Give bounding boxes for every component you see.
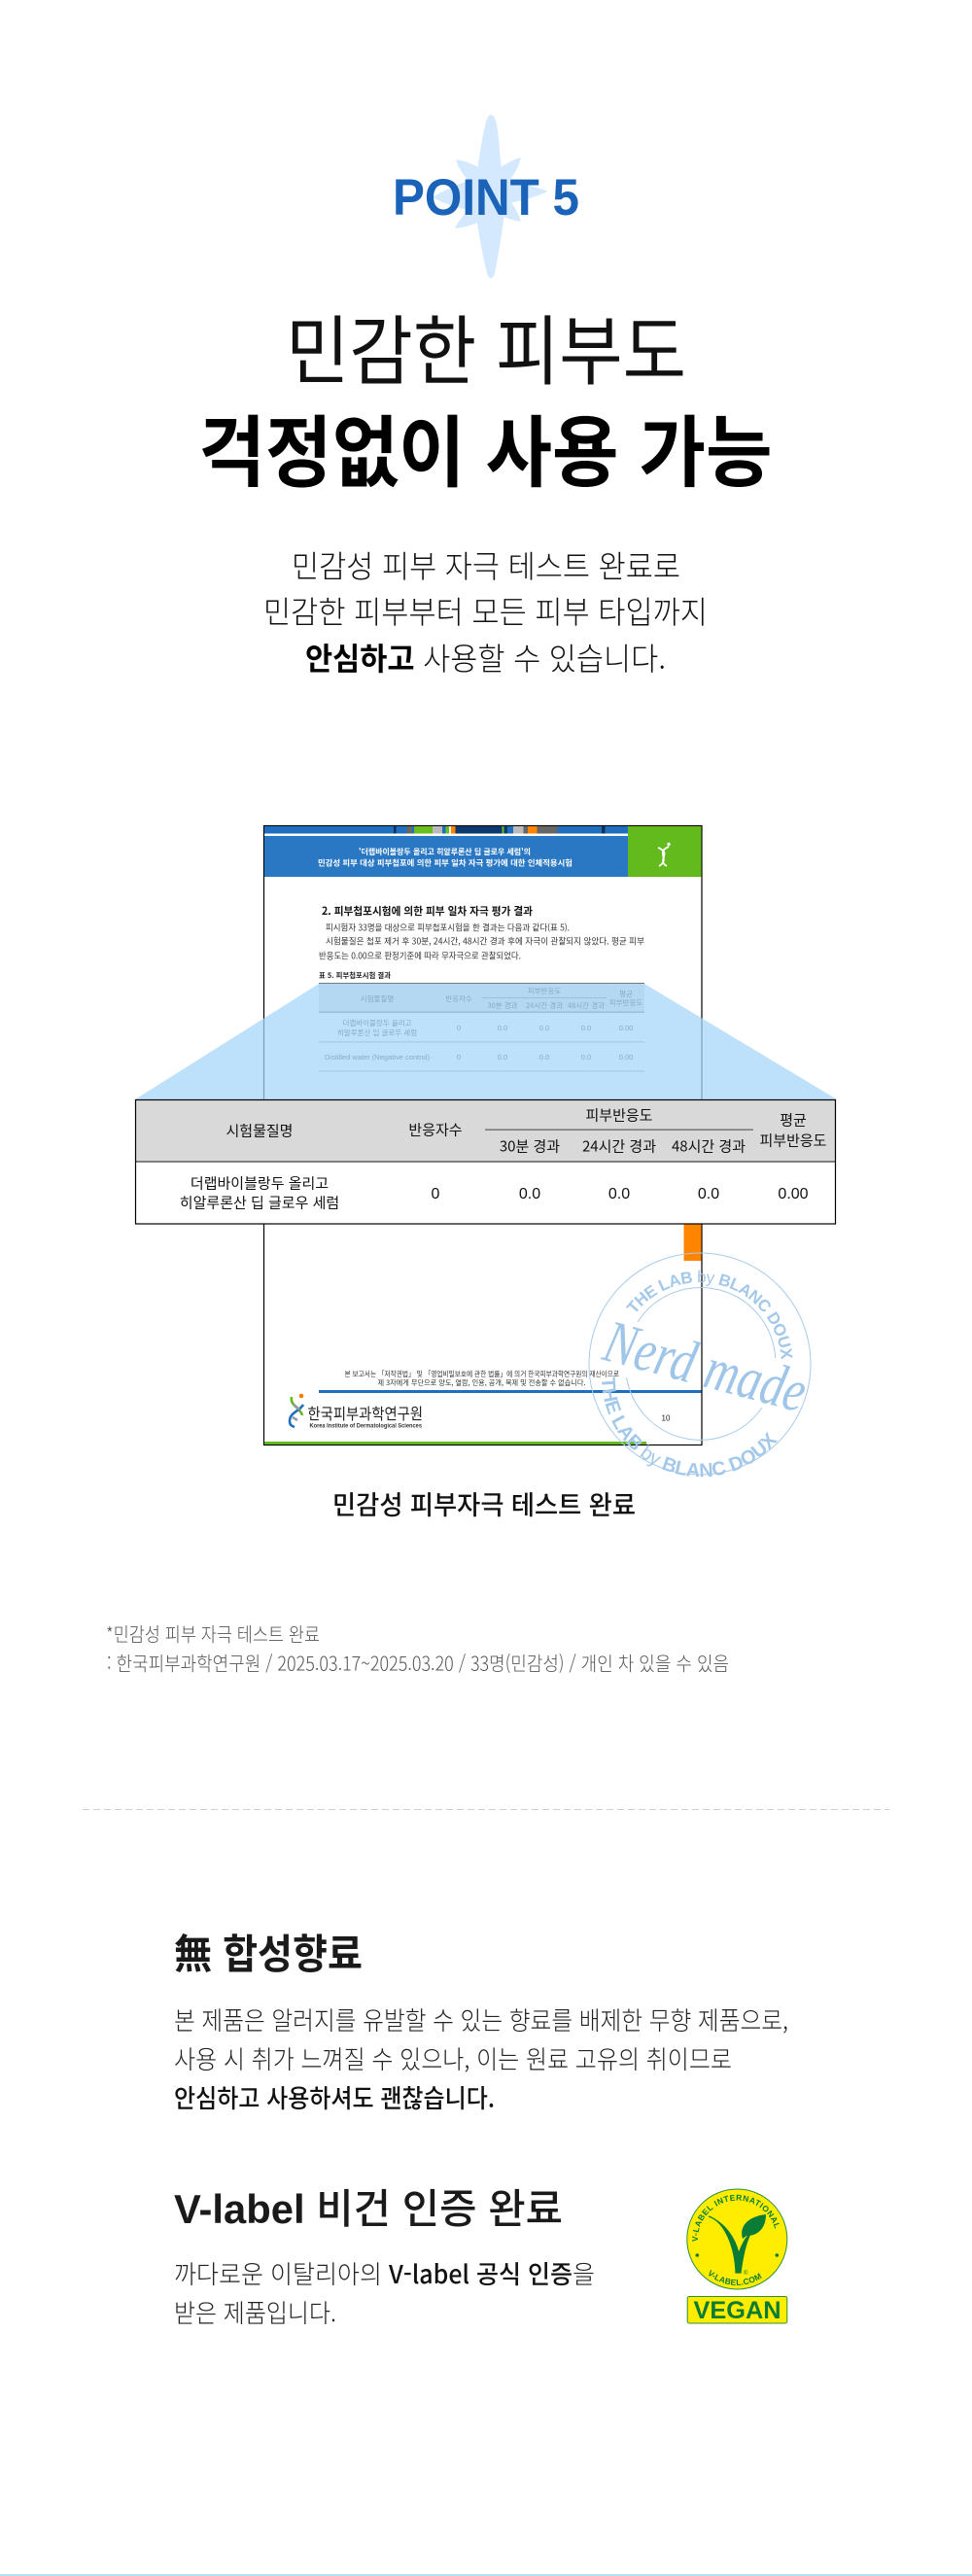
report table caption: 표 5. 피부첩포시험 결과 <box>319 970 391 981</box>
intro text: 민감한 피부부터 모든 피부 타입까지 <box>263 588 708 633</box>
report table: 피부반응도 <box>609 997 642 1008</box>
description <box>174 2255 595 2330</box>
table row values: 0.0 <box>608 1186 630 1202</box>
report table: 0.0 <box>498 1024 507 1032</box>
panel: enlarged results table <box>136 1100 836 1224</box>
heading: 無 합성향료 <box>174 1922 363 1981</box>
report table: 0.0 <box>539 1053 549 1062</box>
description: 안심하고 사용하셔도 괜찮습니다. <box>174 2079 495 2115</box>
report table: 0.00 <box>619 1024 633 1032</box>
icon: v-label vegan badge: V-LABEL.COM <box>709 2269 762 2285</box>
report footer notice <box>344 1369 619 1388</box>
table row values: 0.00 <box>778 1186 809 1202</box>
report body text <box>319 922 644 962</box>
title: 민감한 피부도 <box>286 292 686 400</box>
footnote: : 한국피부과학연구원 / 2025.03.17~2025.03.20 / 33명(민감성) / 개인 차 있을 수 있음 <box>107 1649 729 1676</box>
page number: 10 <box>662 1413 671 1423</box>
report caption: 민감성 피부자극 테스트 완료 <box>332 1484 636 1522</box>
report table: 반응자수 <box>445 993 472 1004</box>
report body text: 피시험자 33명을 대상으로 피부첩포시험을 한 결과는 다음과 같다(표 5). <box>326 922 570 933</box>
report header band: 민감성 피부 대상 피부첩포에 의한 피부 일차 자극 평가에 대한 인체적용시험 <box>318 857 573 869</box>
table row values: 0 <box>432 1186 440 1202</box>
stamp: the lab by blanc doux: THE LAB by BLANC DOUX <box>626 1270 793 1360</box>
footnote <box>106 1619 729 1676</box>
orange side tab <box>684 1215 702 1261</box>
report colour strip <box>264 826 628 834</box>
panel: test report document <box>264 826 702 1445</box>
report table: 히알루론산 딥 글로우 세럼 <box>337 1027 417 1038</box>
table header labels: 30분 경과 <box>500 1135 560 1157</box>
title: 걱정없이 사용 가능 <box>198 391 772 504</box>
report table: 0.0 <box>498 1053 507 1062</box>
icon: v-label vegan badge: V-LABEL INTERNATIONAL <box>692 2195 780 2242</box>
institute logo: 한국피부과학연구원 <box>307 1401 423 1424</box>
stamp: the lab by blanc doux <box>589 1252 814 1478</box>
icon: v-label vegan badge: ® <box>744 2270 748 2277</box>
icon: v-label vegan badge <box>686 2189 787 2324</box>
report table <box>319 983 644 1071</box>
report section heading: 2. 피부첩포시험에 의한 피부 일차 자극 평가 결과 <box>322 903 533 919</box>
heading: V-label 비건 인증 완료 <box>174 2176 563 2236</box>
report table: 시험물질명 <box>361 993 394 1004</box>
report body text: 반응도는 0.00으로 판정기준에 따라 무자극으로 관찰되었다. <box>319 949 521 962</box>
intro text <box>263 542 708 679</box>
intro text: 민감성 피부 자극 테스트 완료로 <box>292 542 680 587</box>
title <box>198 292 772 504</box>
description: 사용 시 취가 느껴질 수 있으나, 이는 원료 고유의 취이므로 <box>174 2040 732 2076</box>
description: 받은 제품입니다. <box>174 2294 336 2330</box>
report table: 30분 경과 <box>487 1000 518 1011</box>
stamp: the lab by blanc doux: Nerd made <box>597 1308 814 1425</box>
table header labels: 24시간 경과 <box>582 1135 656 1157</box>
report table: 피부반응도 <box>528 986 561 996</box>
report table: 24시간 경과 <box>526 1000 563 1011</box>
icon: v-label vegan badge: VEGAN <box>694 2297 781 2324</box>
table header labels: 피부반응도 <box>759 1130 827 1151</box>
stamp: the lab by blanc doux: THE LAB by BLANC DOUX <box>602 1376 778 1478</box>
report table: Distilled water (Negative control) <box>325 1053 430 1062</box>
report table: 0.0 <box>539 1024 549 1032</box>
table header labels: 반응자수 <box>408 1120 463 1139</box>
icon: institute helix on green <box>628 826 702 877</box>
table header labels: 48시간 경과 <box>672 1135 746 1157</box>
description: 본 제품은 알러지를 유발할 수 있는 향료를 배제한 무향 제품으로, <box>174 2002 788 2037</box>
table row values <box>180 1172 809 1213</box>
table header labels: 평균 <box>780 1110 807 1130</box>
report table: 평균 <box>619 989 633 999</box>
description <box>174 2002 788 2115</box>
section: no synthetic fragrance <box>174 1922 788 2115</box>
report table: 더랩바이블랑두 올리고 <box>342 1018 412 1028</box>
point badge <box>393 116 579 278</box>
institute logo <box>290 1394 423 1429</box>
report table: 0 <box>457 1053 461 1062</box>
report table: 0.00 <box>619 1053 633 1062</box>
table header labels <box>226 1104 827 1157</box>
institute logo: Korea Institute of Dermatological Sciences <box>309 1423 423 1429</box>
icon: sparkle star <box>434 116 546 278</box>
report footer notice: 본 보고서는 「저작권법」 및 「영업비밀보호에 관한 법률」에 의거 한국피부과학연구원의 재산이므로 <box>344 1369 619 1379</box>
report table: 0 <box>457 1024 461 1032</box>
table row values: 0.0 <box>519 1186 540 1202</box>
intro text: 안심하고 사용할 수 있습니다. <box>305 635 666 679</box>
section: v-label vegan certification <box>174 2176 595 2330</box>
green footer line <box>264 1442 646 1445</box>
table row values: 히알루론산 딥 글로우 세럼 <box>180 1192 339 1213</box>
report header band: '더랩바이블랑두 올리고 히알루론산 딥 글로우 세럼'의 <box>359 847 531 857</box>
report table: 0.0 <box>581 1053 591 1062</box>
icon: institute helix <box>290 1394 303 1427</box>
report table: 0.0 <box>581 1024 591 1032</box>
point label: POINT 5 <box>393 169 579 226</box>
table row values: 0.0 <box>698 1186 719 1202</box>
table row values: 더랩바이블랑두 올리고 <box>191 1172 329 1194</box>
magnifier wedge <box>135 984 837 1099</box>
report table: 48시간 경과 <box>568 1000 605 1011</box>
report footer notice: 제 3자에게 무단으로 양도, 열람, 인용, 공개, 복제 및 전송할 수 없습니다. <box>377 1377 585 1388</box>
description: 까다로운 이탈리아의 V-label 공식 인증을 <box>174 2255 595 2291</box>
footnote: *민감성 피부 자극 테스트 완료 <box>106 1619 320 1647</box>
report footer rule <box>319 1390 702 1393</box>
report header band <box>264 836 628 877</box>
table header labels: 시험물질명 <box>226 1120 294 1141</box>
table header labels: 피부반응도 <box>585 1104 653 1126</box>
report body text: 시험물질은 첩포 제거 후 30분, 24시간, 48시간 경과 후에 자극이 관찰되지 않았다. 평균 피부 <box>326 935 644 947</box>
